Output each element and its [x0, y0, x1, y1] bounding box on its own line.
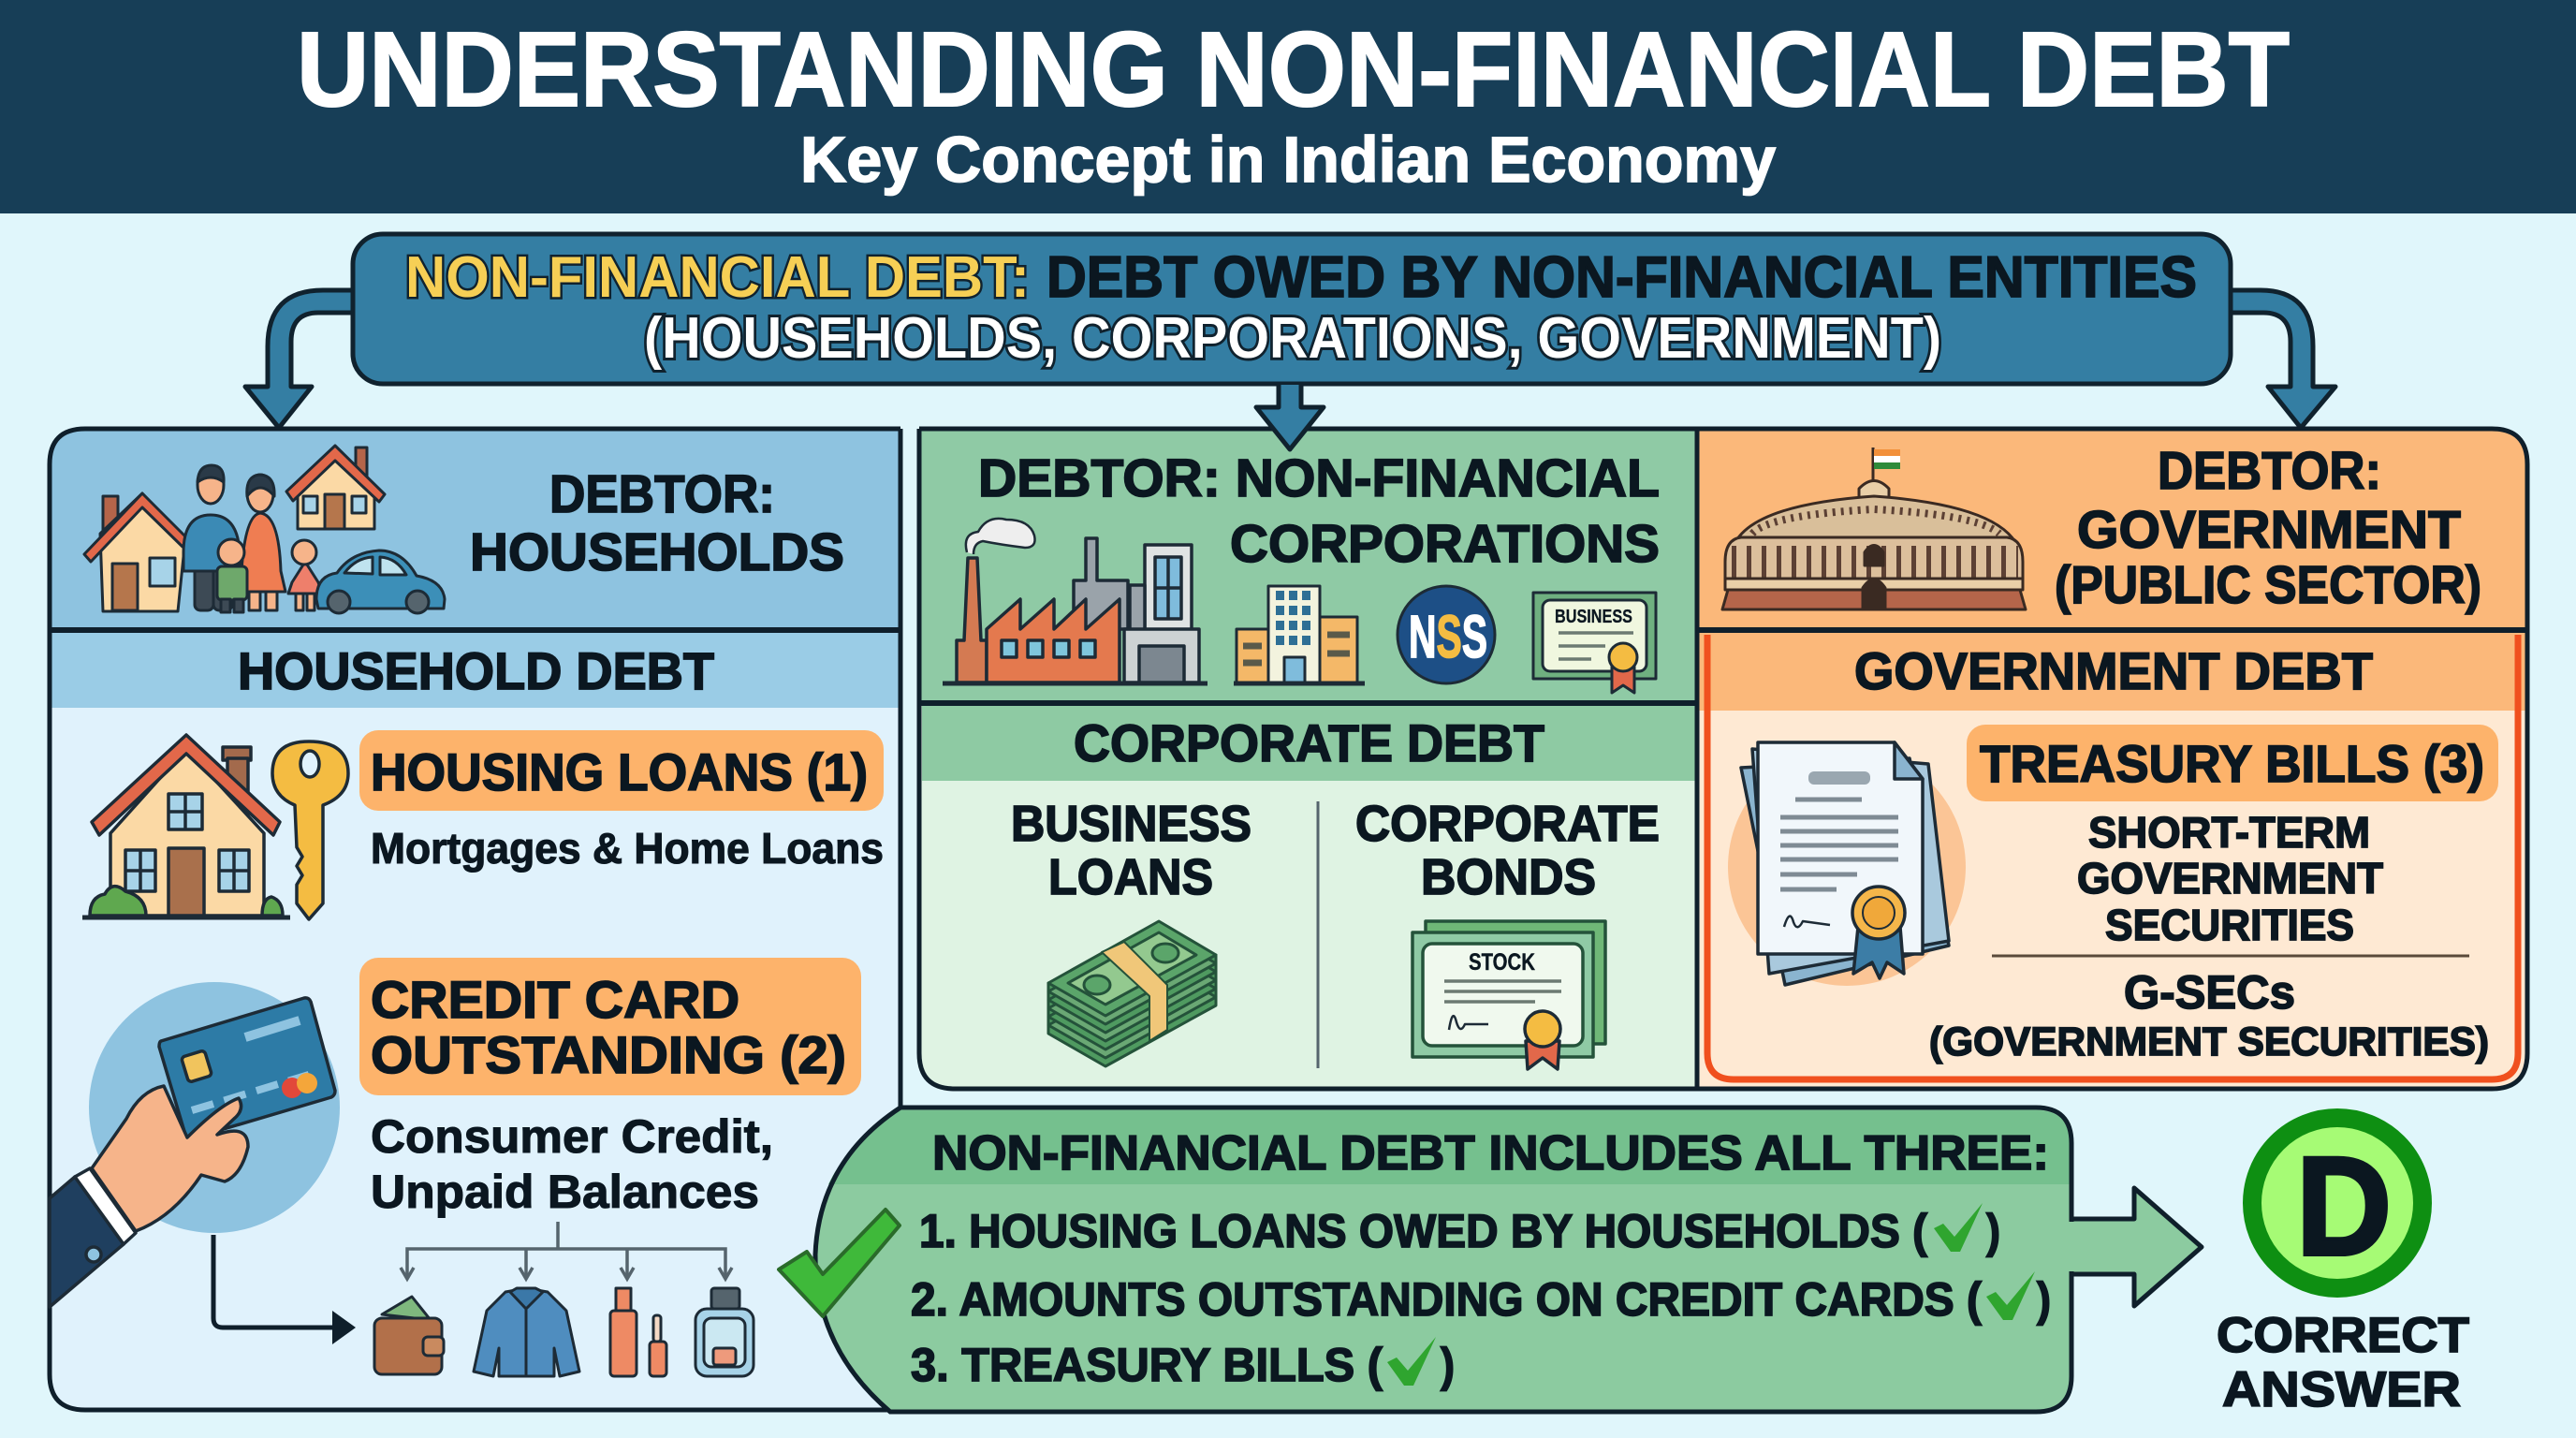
heading: debtor households [470, 464, 844, 582]
highlight border [1707, 635, 2518, 1079]
heading: debtor government [2055, 441, 2481, 615]
icon: money stack [1048, 921, 1216, 1066]
answer badge D: D [2296, 1127, 2392, 1284]
pill: credit card outstanding [359, 958, 861, 1095]
arrow: to households [245, 290, 356, 428]
text: corporate bonds [1355, 796, 1660, 905]
heading: debtor government: DEBTOR: [2158, 441, 2381, 501]
icon: parliament [1722, 448, 2026, 609]
icon: large check mark [779, 1210, 900, 1316]
list item 1: ) [1986, 1205, 2000, 1257]
text: short-term government securities: GOVERNMENT [2077, 854, 2383, 902]
list item 3: ) [1441, 1339, 1455, 1391]
icon: wallet [374, 1297, 444, 1374]
text: short-term government securities [2077, 808, 2383, 949]
heading: debtor government: (PUBLIC SECTOR) [2055, 555, 2481, 615]
text: corporate bonds: BONDS [1421, 849, 1596, 905]
icon: stock certificate [1412, 921, 1605, 1069]
text: short-term government securities: SECURITIES [2105, 901, 2354, 949]
answer badge D [2252, 1118, 2422, 1288]
definition box [353, 234, 2231, 384]
panel: corporations [919, 429, 1697, 1089]
icon: lipstick [610, 1288, 666, 1376]
icon: shirt [474, 1288, 579, 1376]
heading: government debt: GOVERNMENT DEBT [1854, 641, 2373, 700]
definition box: DEBT OWED BY NON-FINANCIAL ENTITIES [1046, 245, 2197, 310]
text: corporate bonds: CORPORATE [1355, 796, 1660, 852]
text: consumer credit [371, 1110, 773, 1218]
text: correct answer: CORRECT [2217, 1308, 2469, 1363]
heading: household debt: HOUSEHOLD DEBT [238, 641, 714, 700]
heading: debtor corporations: DEBTOR: NON-FINANCIAL [978, 448, 1660, 508]
panel: includes all three [815, 1108, 2083, 1412]
panel: households [50, 429, 900, 1410]
list item 1: 1. HOUSING LOANS OWED BY HOUSEHOLDS ( [919, 1205, 1927, 1257]
icon: hand holding credit card [50, 982, 340, 1307]
text: g-secs: (GOVERNMENT SECURITIES) [1929, 1020, 2489, 1064]
icon: house and key [82, 735, 348, 919]
text: consumer credit: Consumer Credit, [371, 1110, 773, 1163]
text: business loans: BUSINESS [1011, 796, 1251, 852]
pill: treasury bills: TREASURY BILLS (3) [1980, 734, 2484, 793]
arrow: card to purchases [213, 1235, 356, 1344]
arrows: branching to purchases [401, 1222, 732, 1279]
arrow: to government [2228, 290, 2335, 428]
text: consumer credit: Unpaid Balances [371, 1166, 759, 1218]
text: g-secs: G-SECs [2124, 966, 2295, 1019]
heading: corporate debt: CORPORATE DEBT [1074, 713, 1544, 772]
heading: debtor corporations [978, 448, 1660, 574]
definition box: NON-FINANCIAL DEBT: [405, 245, 1030, 310]
list item 2: ) [2037, 1273, 2051, 1326]
subtitle: Key Concept in Indian Economy [800, 124, 1776, 196]
arrow: to corporations [1256, 385, 1324, 449]
icon: perfume [695, 1288, 754, 1376]
heading: includes all three: NON-FINANCIAL DEBT INCLUDES ALL THREE: [932, 1126, 2049, 1181]
panel: government [1697, 429, 2527, 1089]
icon: factory [943, 519, 1208, 683]
text: business loans [1011, 796, 1251, 905]
icon: NSS badge [1398, 586, 1495, 683]
heading: debtor households: HOUSEHOLDS [470, 522, 844, 582]
list item 3: 3. TREASURY BILLS ( [911, 1339, 1383, 1391]
icon: business certificate [1533, 593, 1656, 693]
pill: credit card outstanding: CREDIT CARD [371, 970, 739, 1029]
text: g-secs [1929, 966, 2489, 1064]
text: mortgages: Mortgages & Home Loans [371, 824, 884, 873]
text: correct answer [2217, 1308, 2469, 1417]
header band [0, 0, 2576, 213]
heading: debtor government: GOVERNMENT [2077, 500, 2461, 560]
pill: credit card outstanding: OUTSTANDING (2) [371, 1025, 846, 1084]
title: UNDERSTANDING NON-FINANCIAL DEBT [297, 10, 2290, 128]
pill: housing loans: HOUSING LOANS (1) [371, 742, 868, 801]
list item 2: 2. AMOUNTS OUTSTANDING ON CREDIT CARDS ( [911, 1273, 1982, 1326]
icon: NSS badge: NSS [1409, 603, 1487, 670]
text: business loans: LOANS [1048, 849, 1213, 905]
icon: documents with seal [1728, 742, 1966, 986]
definition box: (HOUSEHOLDS, CORPORATIONS, GOVERNMENT) [644, 306, 1941, 371]
heading: debtor corporations: CORPORATIONS [1230, 514, 1660, 574]
heading: debtor households: DEBTOR: [549, 464, 775, 524]
icon: business certificate: BUSINESS [1555, 607, 1632, 627]
icon: office building [1234, 586, 1365, 683]
text: short-term government securities: SHORT-TERM [2088, 808, 2370, 857]
arrow: result to answer [2064, 1188, 2202, 1306]
icon: family with houses and car [84, 446, 445, 613]
text: correct answer: ANSWER [2222, 1362, 2461, 1417]
icon: stock certificate: STOCK [1469, 949, 1535, 976]
